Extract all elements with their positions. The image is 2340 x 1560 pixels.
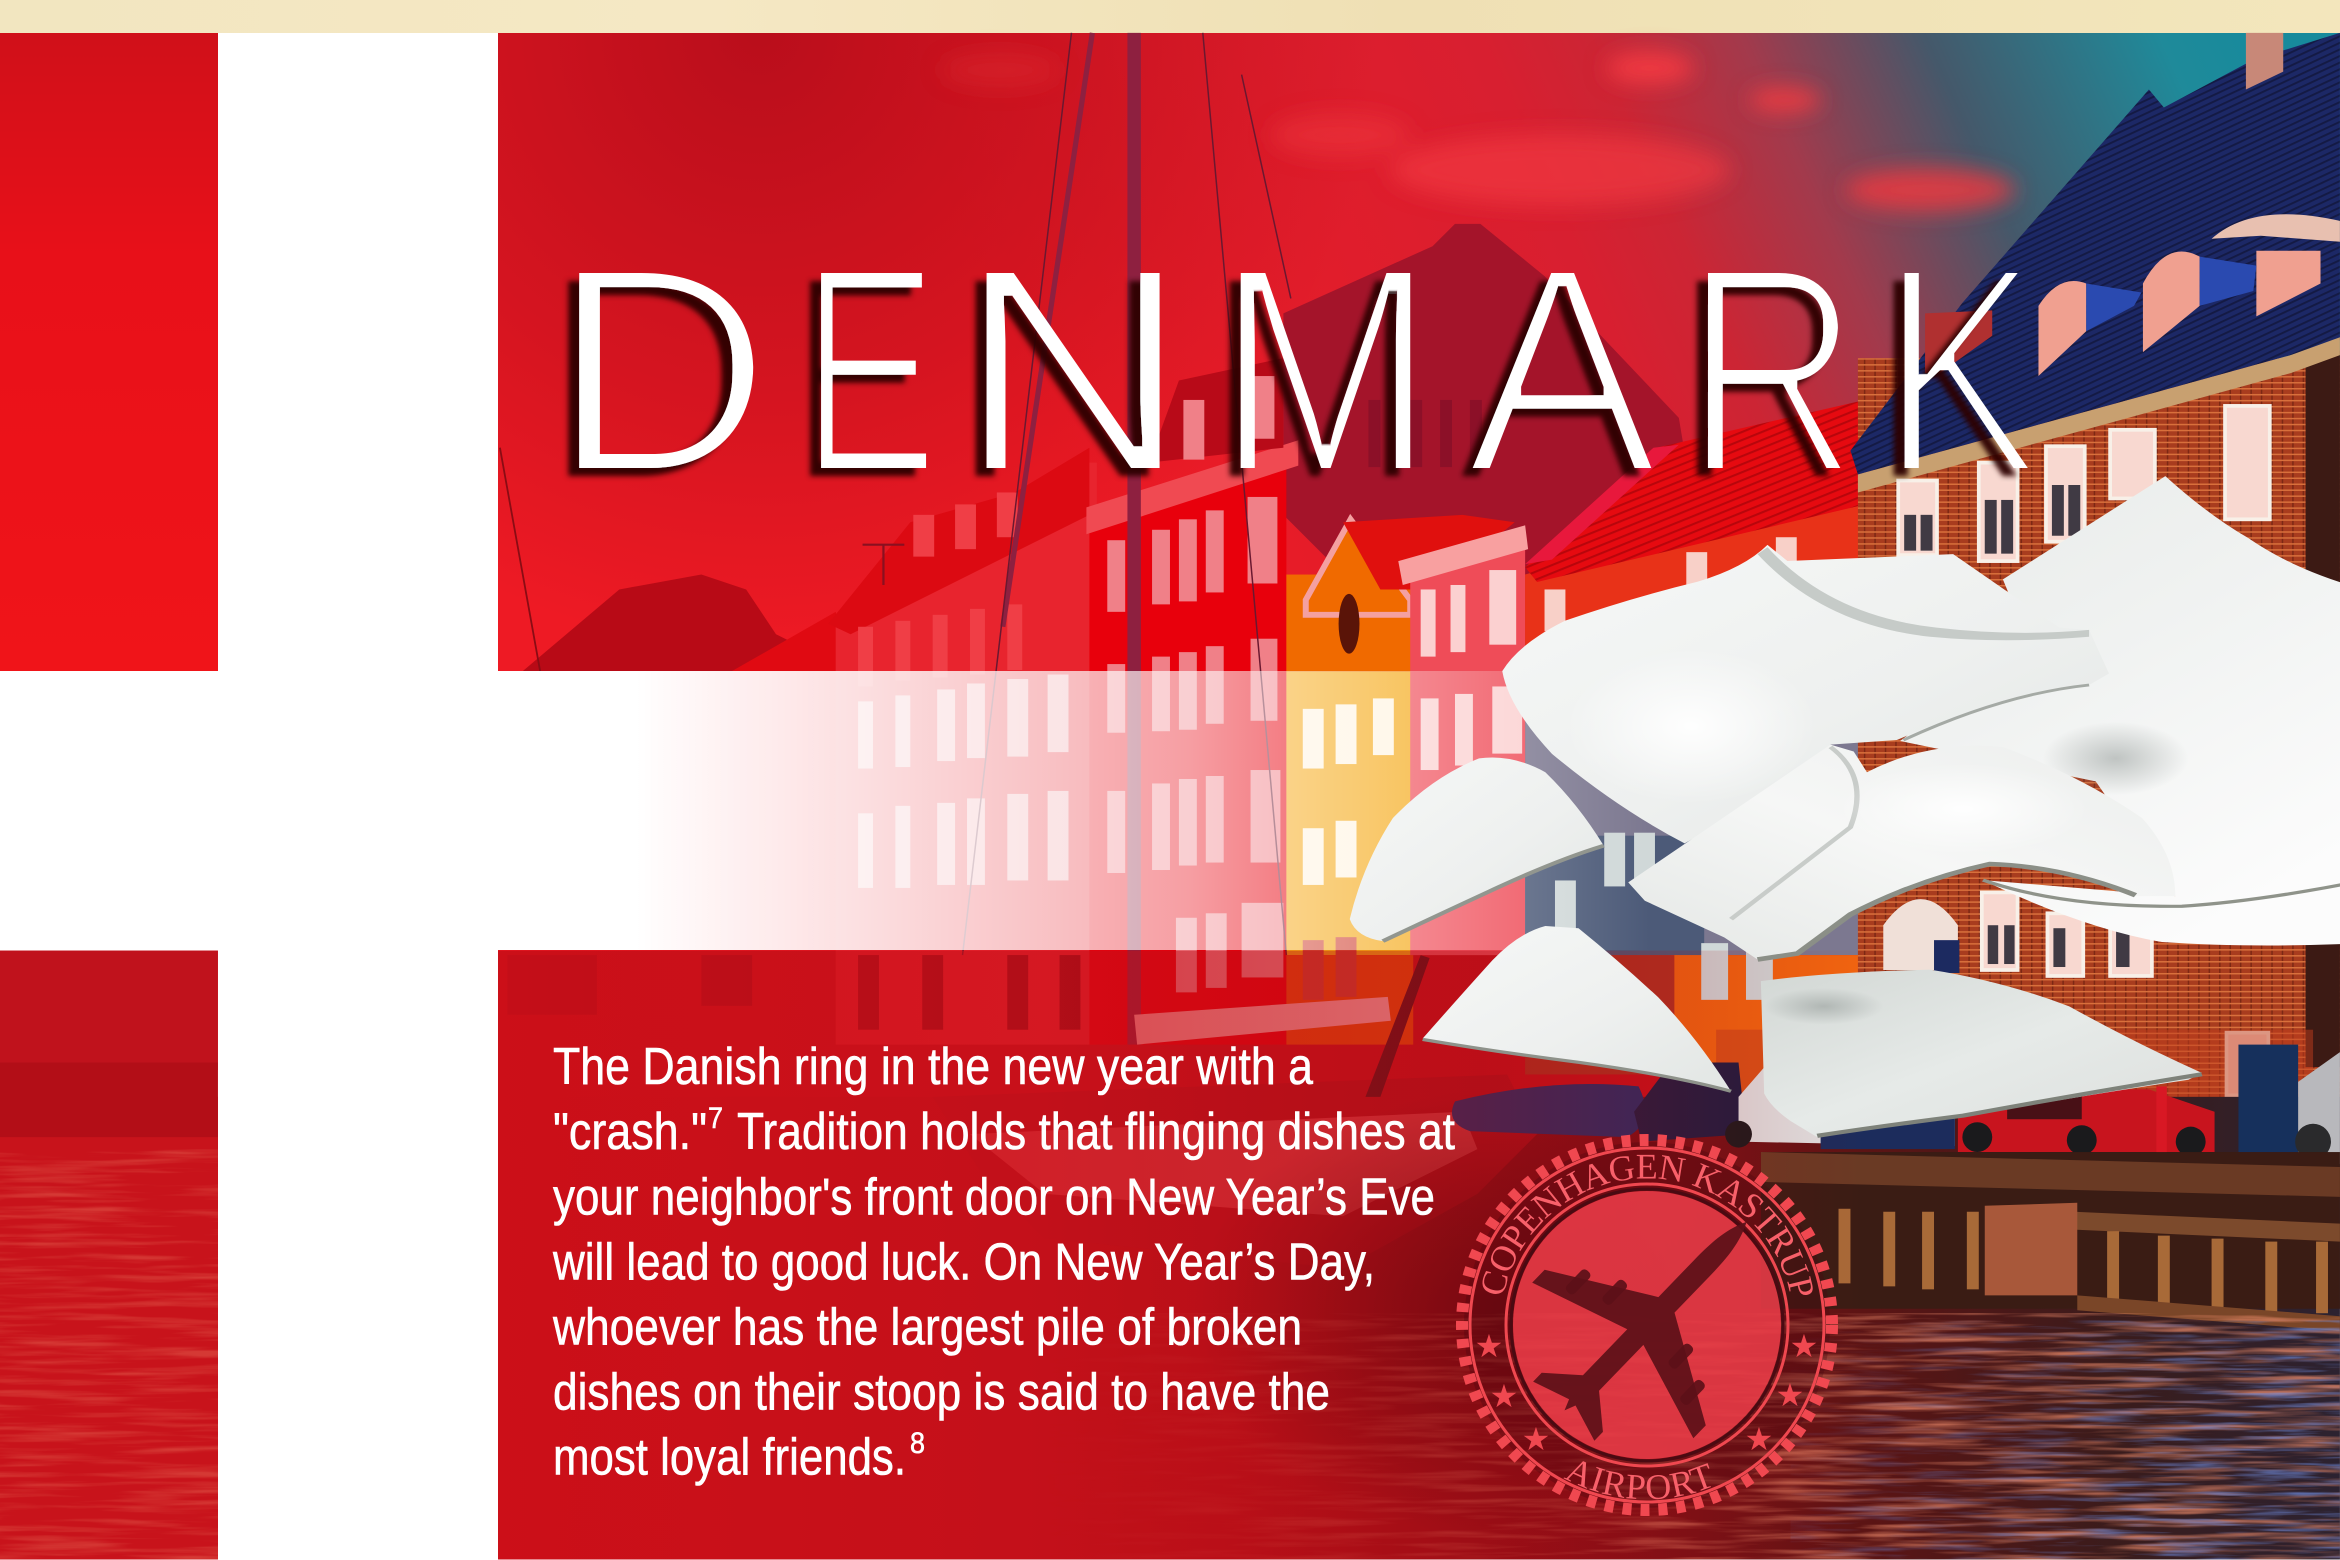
shard: left: [1350, 757, 1604, 941]
orange gable house: [1286, 575, 1413, 672]
grey-blue and orange houses: [1525, 500, 1865, 672]
body text: will lead to good luck. On New Year’s Day,: [552, 1234, 1375, 1292]
brick gable behind: [1283, 224, 1694, 575]
shard: lower left: [1423, 926, 1731, 1091]
body text: Tradition holds that flinging dishes at: [737, 1103, 1455, 1161]
dark car: [1634, 1063, 1746, 1142]
dark harbour shadow: [1194, 1089, 1821, 1537]
lower harbour facade base: [218, 951, 1859, 1130]
title: DENMARK: M: [1215, 205, 1436, 535]
stamp: Copenhagen Kastrup Airport: [1456, 1134, 1838, 1516]
arched door: [1883, 899, 1958, 970]
red building: [1089, 448, 1286, 1045]
broken plate shards: [1350, 476, 2340, 1137]
dinghy: [1452, 1084, 1645, 1137]
red car: [1958, 1089, 2215, 1152]
body text: 8: [910, 1427, 925, 1460]
title: DENMARK: K: [1881, 205, 2040, 535]
body text: most loyal friends.: [553, 1428, 906, 1486]
chimney: [2246, 33, 2283, 90]
stamp stars: ★: [1475, 1327, 1503, 1365]
quay wall: [1761, 1152, 2340, 1331]
title: DENMARK: D: [550, 205, 772, 535]
shard: large right: [1900, 476, 2340, 945]
stamp stars: ★: [1522, 1420, 1550, 1458]
water: [0, 1097, 2340, 1559]
flag: white vertical bar: [218, 33, 498, 1560]
pink house: [1410, 537, 1525, 955]
blue bollard: [2238, 1045, 2298, 1161]
stamp stars: [1475, 1327, 1818, 1458]
grey car: [2298, 1052, 2340, 1164]
title: DENMARK: [550, 205, 2040, 535]
white-pink row: [836, 463, 1097, 1045]
stamp airplane: [1483, 1144, 1827, 1489]
boat: [933, 955, 1537, 1268]
shard: middle front: [1628, 745, 2175, 960]
title: DENMARK: E: [800, 205, 939, 535]
flag: white horizontal bar fading out: [0, 671, 1658, 950]
small far roofs left: [522, 575, 851, 672]
body text: [552, 1038, 1455, 1486]
flag: red top-left square: [0, 33, 218, 671]
brick house with slate roof: [1858, 358, 2340, 1149]
title: DENMARK: R: [1684, 205, 1860, 535]
title: DENMARK: A: [1465, 205, 1660, 535]
title: DENMARK: N: [956, 205, 1190, 535]
stamp stars: ★: [1745, 1420, 1773, 1458]
body text: "crash.": [553, 1103, 707, 1161]
white car: [1739, 1063, 1955, 1146]
stamp text: bottom arc: AIRPORT: [1564, 1461, 1711, 1500]
body text: whoever has the largest pile of broken: [552, 1298, 1302, 1356]
shard: lower right: [1761, 970, 2202, 1137]
water ripples: [0, 1149, 2340, 1559]
stamp stars: ★: [1490, 1377, 1518, 1415]
left column harbour: [0, 951, 218, 1559]
red lower overlay: [498, 951, 1865, 1559]
top paper strip: [0, 0, 2340, 33]
shard: top centre: [1502, 545, 2109, 843]
body text: 7: [708, 1102, 723, 1135]
sky: [498, 33, 2340, 1033]
body text: The Danish ring in the new year with a: [553, 1038, 1313, 1096]
stamp stars: ★: [1776, 1376, 1804, 1414]
body text: your neighbor's front door on New Year’s Eve: [553, 1168, 1435, 1226]
mast and rigging: [500, 33, 1291, 1045]
stamp text: top arc: COPENHAGEN KASTRUP: [1482, 1154, 1813, 1295]
body text: dishes on their stoop is said to have the: [553, 1364, 1330, 1422]
stamp stars: ★: [1790, 1327, 1818, 1365]
